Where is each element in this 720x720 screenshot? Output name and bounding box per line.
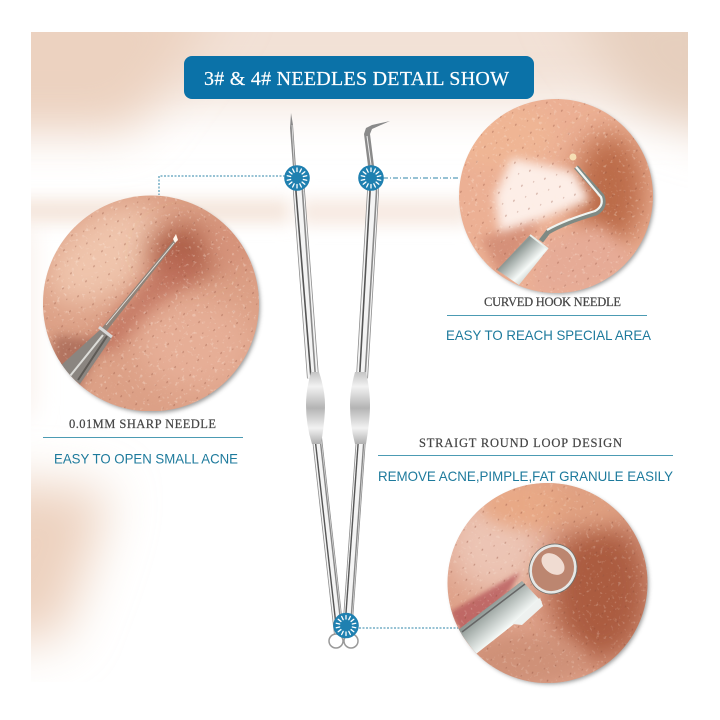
pimple on hook tip (570, 154, 576, 160)
title banner (184, 56, 534, 99)
caption: sharp needle: 0.01MM SHARP NEEDLE (69, 417, 216, 431)
dashed connector: hook needle (383, 177, 460, 179)
caption: curved hook: CURVED HOOK NEEDLE (484, 295, 621, 309)
blue marker: top right (358, 165, 384, 191)
dashed connector: sharp needle (159, 176, 285, 195)
needle loops (329, 634, 358, 648)
pimple tip (173, 234, 178, 243)
caption: round loop: STRAIGT ROUND LOOP DESIGN (419, 436, 622, 450)
needle 4#: hook pick (344, 121, 390, 634)
blue marker: top left (284, 165, 310, 191)
photo circle: round loop on skin (447, 481, 650, 686)
loop tool in photo (459, 544, 578, 654)
caption: round loop (378, 436, 674, 484)
caption: sharp needle: EASY TO OPEN SMALL ACNE (54, 450, 238, 466)
title banner: 3# & 4# NEEDLES DETAIL SHOW (204, 68, 509, 90)
needle in photo (58, 240, 177, 384)
hook needle in photo (497, 167, 603, 285)
caption: curved hook (446, 295, 652, 343)
dashed connector: round loop (359, 627, 460, 629)
caption: sharp needle (43, 417, 243, 466)
photo circle: sharp needle on skin (43, 196, 263, 416)
needle 3#: sharp pick (290, 113, 342, 634)
photo circle: curved hook on skin (445, 99, 654, 295)
caption: round loop: REMOVE ACNE,PIMPLE,FAT GRANULE EASILY (378, 468, 674, 484)
blue marker: bottom (333, 613, 359, 638)
caption: curved hook: EASY TO REACH SPECIAL AREA (446, 327, 652, 343)
